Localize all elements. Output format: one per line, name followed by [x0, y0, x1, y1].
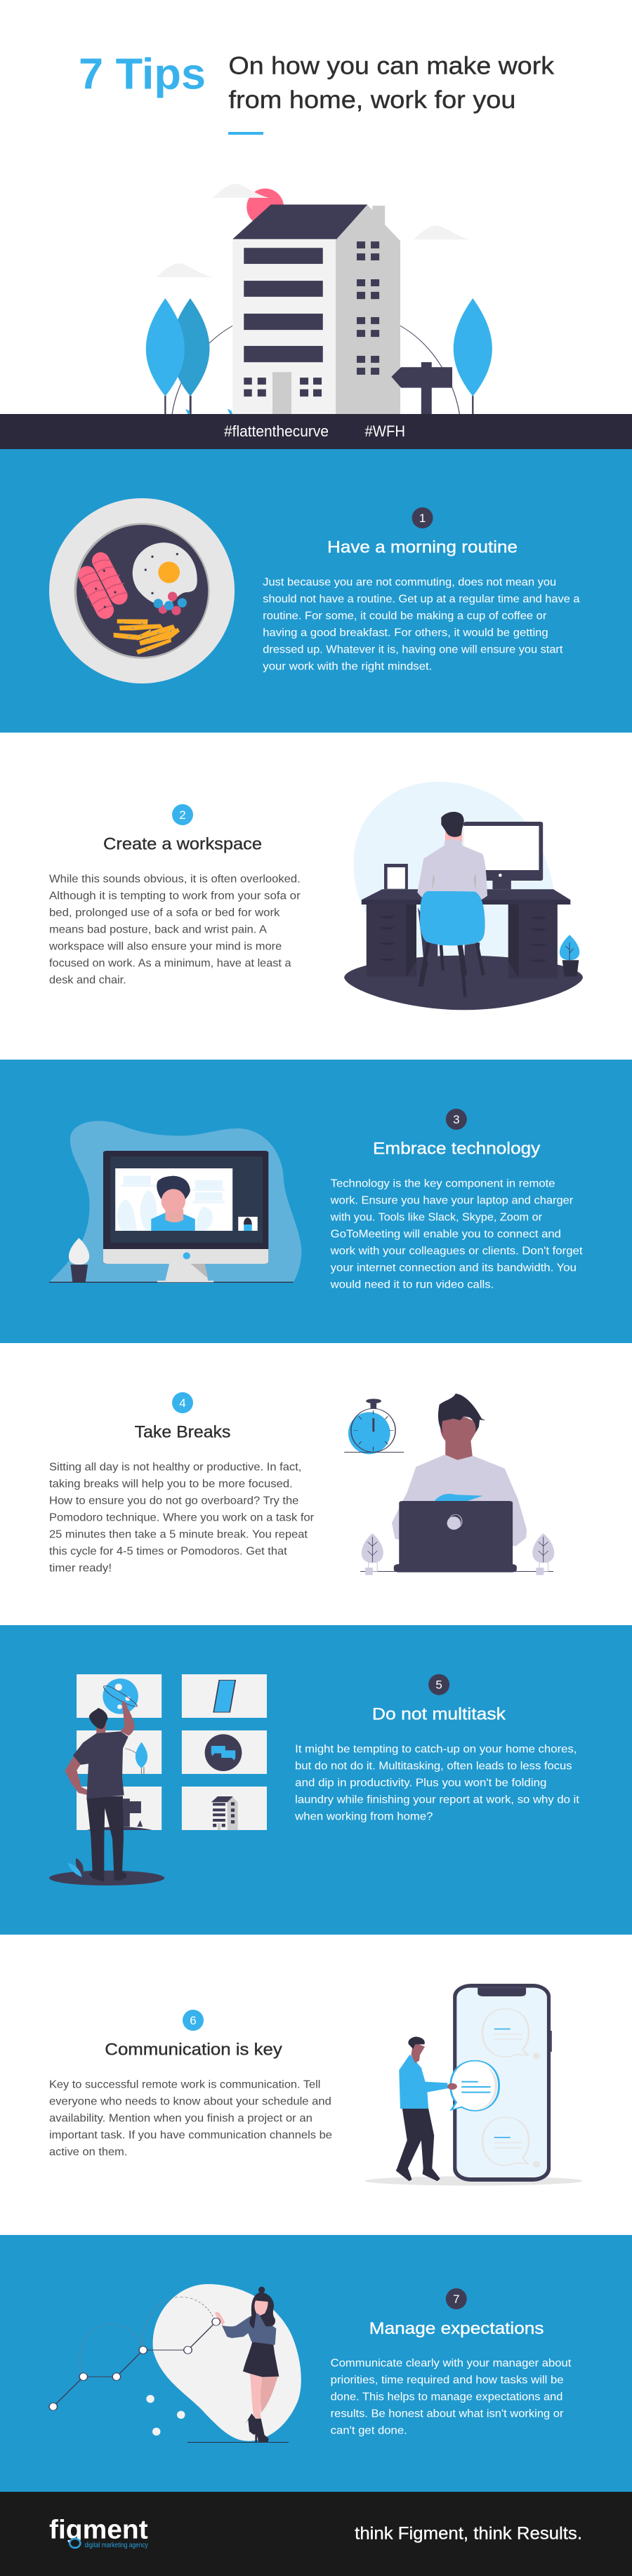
illustration: breakfast plate [49, 498, 235, 683]
body text: active on them. [49, 2146, 127, 2158]
heading: Embrace technology [373, 1140, 540, 1159]
body text: It might be tempting to catch-up on your home chores, [295, 1743, 577, 1755]
plate [49, 498, 235, 683]
body text: Pomodoro technique. Where you work on a task for [49, 1511, 315, 1523]
body text: availability. Mention when you finish a project or an [49, 2112, 312, 2124]
heading: Create a workspace [103, 835, 262, 854]
body text: Key to successful remote work is communication. Tell [49, 2078, 320, 2090]
body text: bed, prolonged use of a sofa or bed for work [49, 907, 280, 919]
body text: focused on work. As a minimum, have at least a [49, 957, 291, 969]
number badge [183, 2010, 204, 2031]
panel: tip 6 [49, 1984, 582, 2186]
chair legs [422, 942, 483, 975]
hashtags: #WFH [365, 422, 405, 440]
number badge [412, 507, 433, 528]
icon: chat bubble bottom [482, 2117, 540, 2168]
background blob [49, 1121, 301, 1282]
body text: everyone who needs to know about your schedule and [49, 2095, 331, 2107]
person [392, 1394, 527, 1546]
illustration: video call on monitor [49, 1121, 301, 1283]
panel: tip 4 [49, 1392, 554, 1575]
heading: Do not multitask [372, 1704, 506, 1723]
icon: small plants [362, 1533, 554, 1575]
body text: with you. Tools like Slack, Skype, Zoom or [330, 1211, 543, 1223]
number badge: 7 [453, 2293, 460, 2306]
body text: should not have a routine. Get up at a regular time and have a [263, 593, 580, 605]
body text [330, 1177, 583, 1290]
desk scene [344, 782, 583, 1010]
heading: Communication is key [105, 2041, 282, 2060]
body text: priorities, time required and how tasks will be [331, 2374, 564, 2386]
small video thumbnail [238, 1217, 258, 1231]
body text: your work with the right mindset. [263, 660, 432, 672]
icon: berries [154, 592, 187, 615]
chair [420, 891, 485, 945]
body text [49, 1461, 315, 1574]
task cards [77, 1674, 267, 1830]
panel: tip 3 [0, 1060, 632, 1343]
body text: would need it to run video calls. [330, 1279, 494, 1290]
subheading: from home, work for you [229, 86, 515, 114]
monitor [463, 822, 543, 889]
person legs [418, 907, 480, 970]
body text: means bad posture, back and wrist pain. A [49, 923, 267, 935]
ground shadow [364, 2176, 582, 2186]
body text: GoToMeeting will enable you to connect and [331, 1228, 561, 1240]
chart [49, 2297, 220, 2410]
ground shadow [49, 1871, 164, 1886]
person and leaves [65, 1701, 135, 1882]
icon: egg [133, 542, 197, 605]
body text: when working from home? [294, 1810, 433, 1822]
body text: Although it is tempting to work from your sofa or [49, 890, 301, 902]
arcs behind building [172, 326, 459, 414]
seated person and chair [417, 812, 487, 975]
body text: Technology is the key component in remote [331, 1177, 555, 1189]
subheading: On how you can make work [229, 53, 555, 80]
body text [331, 2357, 572, 2436]
hashtags: #flattenthecurve [224, 422, 329, 440]
icon: chat [205, 1734, 242, 1771]
body text: Sitting all day is not healthy or productive. In fact, [49, 1461, 301, 1473]
hashtag band [0, 414, 632, 449]
illustration: person with laptop and timer [344, 1394, 554, 1575]
icon: clouds [157, 184, 470, 277]
number badge [172, 804, 193, 825]
body text [263, 576, 580, 672]
body text: having a good breakfast. For others, it would be getting [263, 627, 548, 639]
icon: globe [103, 1679, 138, 1714]
hashtags [224, 422, 405, 440]
body text: Communicate clearly with your manager about [331, 2357, 572, 2369]
woman [215, 2287, 279, 2442]
illustration: apartment building [146, 184, 492, 414]
number badge [172, 1392, 193, 1413]
header title [79, 51, 555, 135]
icon: potted plant [69, 1238, 89, 1282]
body text: can't get done. [331, 2424, 407, 2436]
icon: stopwatch [344, 1399, 404, 1454]
panel: tip 2 [48, 782, 583, 1010]
icon: laptop [360, 1501, 553, 1573]
body text: taking breaks will help you to be more focused. [49, 1478, 293, 1490]
number badge: 3 [453, 1113, 460, 1126]
body text: dressed up. Whatever it is, having one will ensure you start [263, 643, 563, 655]
illustration: person and phone chat [364, 1984, 582, 2186]
icon: foreground leaves [68, 1858, 84, 1877]
body text: work. Ensure you have your laptop and charger [330, 1194, 574, 1206]
icon: potted plant [560, 935, 579, 977]
desk [362, 889, 570, 978]
icon: phone [213, 1680, 235, 1712]
monitor [103, 1151, 268, 1282]
person [65, 1701, 135, 1882]
background blob [353, 782, 556, 956]
floor platform [344, 956, 583, 1010]
person torso and head [417, 812, 487, 900]
chair legs [418, 942, 467, 997]
number badge: 4 [179, 1396, 186, 1410]
heading: Take Breaks [135, 1422, 230, 1441]
task cards and icons [49, 1674, 267, 1886]
body text: results. Be honest about what isn't working or [331, 2408, 564, 2420]
logo: figment: digital marketing agency [85, 2542, 148, 2549]
food [80, 542, 197, 655]
panel: tip 5 [0, 1625, 632, 1935]
illustration: person at desk [344, 782, 583, 1010]
person [396, 2036, 457, 2181]
icon: sun [246, 189, 284, 226]
background blob and dots [146, 2284, 301, 2443]
subheading [229, 53, 555, 114]
body text: workspace will also ensure your mind is more [48, 940, 282, 952]
body text: How to ensure you do not go overboard? Try the [49, 1495, 298, 1507]
body text: work with your colleagues or clients. Don't forget [330, 1245, 583, 1257]
heading: 7 Tips: 7 Tips [79, 51, 206, 98]
icon: signpost [391, 362, 452, 414]
heading: Manage expectations [369, 2319, 544, 2338]
body text [48, 873, 301, 986]
picture frame [384, 864, 408, 889]
body text: done. This helps to manage expectations and [331, 2391, 562, 2403]
panel: tip 7 [0, 2235, 632, 2492]
body text: Just because you are not commuting, does not mean you [263, 576, 556, 588]
body text: important task. If you have communication channels be [49, 2129, 332, 2141]
icon: mini building [211, 1796, 238, 1830]
number badge [446, 2288, 467, 2309]
icon: signpost [86, 1798, 152, 1830]
body text [294, 1743, 579, 1822]
icon: chat bubble top [482, 2009, 540, 2060]
progress line chart [49, 2318, 220, 2410]
number badge [428, 1674, 449, 1695]
body text: routine. For some, it could be making a cup of coffee or [263, 610, 547, 622]
illustration: woman with progress chart [49, 2284, 301, 2443]
tagline: think Figment, think Results. [355, 2524, 582, 2544]
icon: chat bubble active [451, 2061, 499, 2111]
accent underline [228, 132, 263, 135]
number badge [446, 1109, 467, 1130]
icon: sausages [80, 560, 127, 612]
body text: While this sounds obvious, it is often overlooked. [49, 873, 301, 885]
panel: tip 1 [0, 449, 632, 733]
icon: phone [453, 1984, 552, 2182]
heading: Have a morning routine [327, 538, 518, 557]
footer [0, 2492, 632, 2576]
body text: your internet connection and its bandwidth. You [331, 1262, 577, 1274]
body text: laundry while finishing your report at work, so why do it [295, 1794, 579, 1806]
number badge: 6 [190, 2014, 197, 2027]
body text [49, 2078, 332, 2158]
body text: this cycle for 4-5 times or Pomodoros. Get that [49, 1545, 287, 1557]
building [232, 204, 400, 414]
icon: leaf [125, 1742, 147, 1774]
body text: but do not do it. Multitasking, often leads to less focus [295, 1760, 572, 1772]
illustration: person choosing tasks [49, 1674, 267, 1886]
logo: figment: figment [49, 2515, 148, 2544]
body text: 25 minutes then take a 5 minute break. You repeat [49, 1528, 308, 1540]
number badge: 2 [179, 808, 186, 822]
icon: trees [146, 298, 492, 414]
number badge: 1 [419, 512, 426, 525]
body text: timer ready! [49, 1562, 112, 1574]
dashed arcs [80, 2297, 213, 2372]
body text: and dip in productivity. Plus you won't be folding [295, 1777, 546, 1789]
video window [115, 1168, 232, 1231]
icon: fries [114, 619, 180, 655]
body text: desk and chair. [49, 974, 126, 986]
number badge: 5 [435, 1679, 442, 1692]
